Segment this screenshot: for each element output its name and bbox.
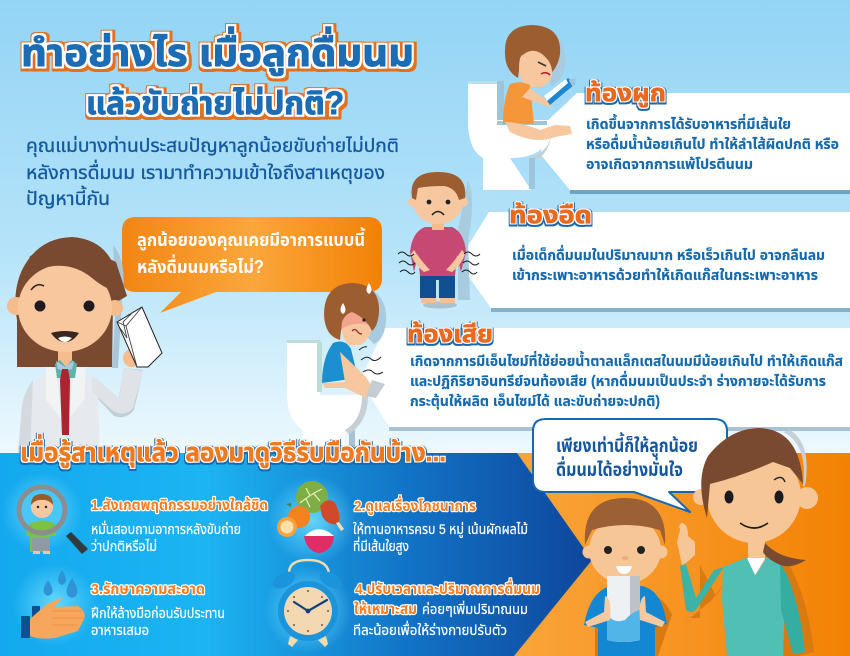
- panel: bottom blue area: [0, 453, 592, 656]
- panel: constipation card: [541, 93, 850, 194]
- text: constipation description: หรือดื่มน้ำน้อยเกินไป ทำให้ลำไส้ผิดปกติ หรือ: [586, 133, 839, 153]
- text: tip 1: หมั่นสอบถามอาการหลังขับถ่าย: [91, 520, 241, 537]
- icon: magnifier with boy: [2, 472, 88, 554]
- illustration: mother with thumb up: [677, 428, 818, 656]
- panel: bloating card: [458, 212, 850, 312]
- background sky: [0, 0, 850, 456]
- text: tip 2: ให้ทานอาหารครบ 5 หมู่ เน้นผักผลไม้: [353, 521, 528, 538]
- speech bubble: doctor question: [122, 217, 382, 313]
- icon: alarm clock: [264, 560, 352, 654]
- text: constipation description: อาจเกิดจากการแพ้โปรตีนนม: [586, 157, 753, 173]
- speech bubble: mother reassurance: ดื่มนมได้อย่างมั่นใจ: [556, 456, 683, 481]
- text: tip 1: 1.สังเกตพฤติกรรมอย่างใกล้ชิด: [91, 496, 268, 514]
- illustration: doctor with milk carton: [7, 237, 162, 453]
- panel: diarrhea card: [360, 328, 850, 431]
- text: bloating description: [512, 244, 825, 284]
- text: tip 3: อาหารเสมอ: [91, 622, 149, 638]
- icon: healthy food: [268, 476, 356, 564]
- speech bubble: doctor question: หลังดื่มนมหรือไม่?: [137, 254, 264, 277]
- text: diarrhea description: [410, 350, 843, 410]
- text: constipation description: เกิดขึ้นจากการได้รับอาหารที่มีเส้นใย: [586, 113, 791, 133]
- text: constipation description: [586, 113, 839, 173]
- text: tip 4: ให้เหมาะสม: [354, 600, 417, 618]
- speech bubble: mother reassurance: [533, 419, 727, 512]
- title: แล้วขับถ่ายไม่ปกติ?: [86, 85, 344, 121]
- section heading: how to cope: เมื่อรู้สาเหตุแล้ว ลองมาดูวิธีรับมือกันบ้าง...: [20, 434, 446, 468]
- title: ทำอย่างไร เมื่อลูกดื่มนม: [21, 26, 414, 76]
- text: tip 2: 2.ดูแลเรื่องโภชนาการ: [354, 495, 476, 516]
- text: bloating description: เมื่อเด็กดื่มนมในปริมาณมาก หรือเร็วเกินไป อาจกลืนลม: [512, 244, 825, 264]
- text: tip 2: [353, 495, 528, 555]
- illustration: toilet with constipated boy: [468, 25, 576, 190]
- text: tip 1: ว่าปกติหรือไม่: [91, 538, 157, 554]
- illustration: boy drinking milk: [582, 498, 672, 656]
- text: tip 3: 3.รักษาความสะอาด: [91, 581, 205, 598]
- text: diarrhea description: กระตุ้นให้ผลิต เอ็นไซม์ได้ และขับถ่ายจะปกติ): [410, 393, 660, 410]
- text: tip 3: ฝึกให้ล้างมือก่อนรับประทาน: [91, 605, 225, 621]
- heading: bloating: ท้องอืด: [509, 201, 592, 229]
- icon: washing hands with water drops: [13, 563, 97, 647]
- intro text: [26, 134, 399, 210]
- intro text: ปัญหานี้กัน: [26, 185, 110, 210]
- speech bubble: doctor question: ลูกน้อยของคุณเคยมีอาการแบบนี้: [137, 227, 366, 251]
- heading: diarrhea: ท้องเสีย: [407, 320, 493, 348]
- text: tip 4: [353, 578, 540, 638]
- heading: constipation: ท้องผูก: [585, 79, 666, 108]
- text: tip 2: ที่มีเส้นใยสูง: [353, 536, 409, 555]
- illustration: toilet with diarrhea boy: [287, 283, 386, 454]
- title: [21, 26, 414, 121]
- text: tip 4: ค่อยๆเพิ่มปริมาณนม: [422, 600, 528, 617]
- illustration: boy with bloating: [398, 172, 480, 308]
- intro text: คุณแม่บางท่านประสบปัญหาลูกน้อยขับถ่ายไม่ปกติ: [26, 134, 399, 158]
- speech bubble: mother reassurance: เพียงเท่านี้ก็ให้ลูกน้อย: [556, 432, 698, 457]
- text: tip 3: [91, 581, 225, 638]
- text: diarrhea description: และปฏิกิริยาอินทรีย์จนท้องเสีย (หากดื่มนมเป็นประจำ ร่างกายจะได้รับการ: [410, 370, 826, 390]
- text: bloating description: เข้ากระเพาะอาหารด้วยทำให้เกิดแก๊สในกระเพาะอาหาร: [512, 268, 818, 284]
- panel: bottom orange area: [500, 453, 850, 656]
- text: tip 4: ทีละน้อยเพื่อให้ร่างกายปรับตัว: [353, 620, 507, 638]
- intro text: หลังการดื่มนม เรามาทำความเข้าใจถึงสาเหตุของ: [26, 159, 385, 184]
- text: tip 1: [91, 496, 268, 554]
- text: tip 4: 4.ปรับเวลาและปริมาณการดื่มนม: [355, 578, 540, 598]
